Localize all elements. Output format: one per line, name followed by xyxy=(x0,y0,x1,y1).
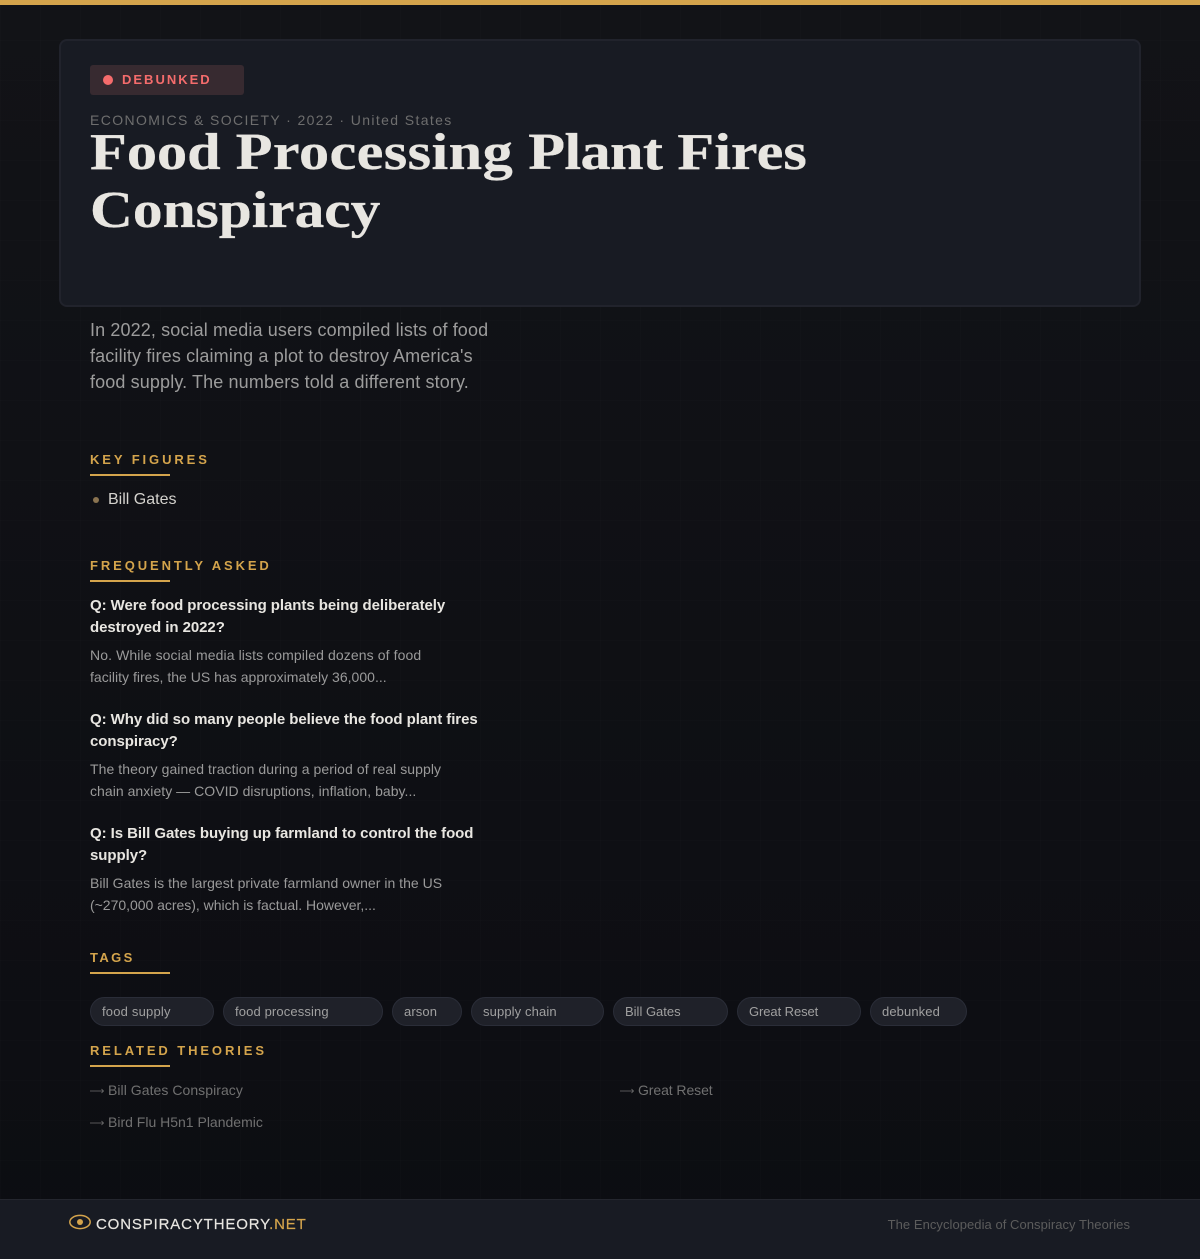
faq 2 question: conspiracy? xyxy=(90,733,178,750)
related link xyxy=(90,1082,243,1098)
summary text xyxy=(90,320,488,392)
category meta line: ECONOMICS & SOCIETY · 2022 · United States xyxy=(90,112,453,128)
faq 3 question: Q: Is Bill Gates buying up farmland to control the food xyxy=(90,825,473,842)
faq 3 answer xyxy=(90,875,442,913)
summary text: food supply. The numbers told a different story. xyxy=(90,372,469,392)
tag list xyxy=(90,997,967,1026)
tag: food processing xyxy=(235,1004,329,1019)
icon: arrow xyxy=(90,1088,104,1094)
faq 1 answer: facility fires, the US has approximately 36,000... xyxy=(90,669,387,685)
tag xyxy=(223,997,383,1026)
heading: frequently asked: FREQUENTLY ASKED xyxy=(90,558,272,573)
faq 2 answer: The theory gained traction during a period of real supply xyxy=(90,761,441,777)
tag xyxy=(90,997,214,1026)
figure name: Bill Gates xyxy=(108,491,176,508)
faq 1 question xyxy=(90,597,446,636)
tag: debunked xyxy=(882,1004,940,1019)
faq 1 answer xyxy=(90,647,421,685)
icon: status dot xyxy=(103,75,113,85)
badge: debunked xyxy=(90,65,244,95)
faq 3 answer: (~270,000 acres), which is factual. However,... xyxy=(90,897,376,913)
faq 2 question xyxy=(90,711,478,750)
related link xyxy=(620,1082,713,1098)
tag: arson xyxy=(404,1004,437,1019)
tag: Great Reset xyxy=(749,1004,818,1019)
faq 3 question: supply? xyxy=(90,847,147,864)
footer xyxy=(0,1199,1200,1259)
faq 2 question: Q: Why did so many people believe the food plant fires xyxy=(90,711,478,728)
key figure item xyxy=(93,491,176,508)
tag: supply chain xyxy=(483,1004,557,1019)
summary text: In 2022, social media users compiled lists of food xyxy=(90,320,488,340)
title: Food Processing Plant Fires xyxy=(90,124,807,181)
icon: arrow xyxy=(90,1120,104,1126)
tag xyxy=(870,997,967,1026)
tag: food supply xyxy=(102,1004,171,1019)
heading: key figures: KEY FIGURES xyxy=(90,452,210,467)
faq 3 answer: Bill Gates is the largest private farmland owner in the US xyxy=(90,875,442,891)
tag xyxy=(737,997,861,1026)
icon: arrow xyxy=(620,1088,634,1094)
link text: Great Reset xyxy=(638,1082,713,1098)
faq 3 question xyxy=(90,825,473,864)
icon: eye logo xyxy=(69,1214,91,1230)
tag xyxy=(471,997,604,1026)
tag xyxy=(613,997,728,1026)
heading: related theories: RELATED THEORIES xyxy=(90,1043,267,1058)
faq 1 question: Q: Were food processing plants being deliberately xyxy=(90,597,445,614)
badge label: DEBUNKED xyxy=(122,72,212,87)
title: Conspiracy xyxy=(90,182,380,239)
tagline: The Encyclopedia of Conspiracy Theories xyxy=(888,1217,1130,1232)
faq 2 answer: chain anxiety — COVID disruptions, inflation, baby... xyxy=(90,783,416,799)
faq 1 question: destroyed in 2022? xyxy=(90,619,225,636)
title xyxy=(90,124,807,239)
panel: hero header xyxy=(59,39,1141,307)
summary text: facility fires claiming a plot to destroy America's xyxy=(90,346,473,366)
related link xyxy=(90,1114,263,1130)
link text: Bill Gates Conspiracy xyxy=(108,1082,243,1098)
faq 2 answer xyxy=(90,761,441,799)
logo text: CONSPIRACYTHEORY.NET xyxy=(96,1216,307,1233)
faq 1 answer: No. While social media lists compiled dozens of food xyxy=(90,647,421,663)
top accent bar xyxy=(0,0,1200,5)
tag xyxy=(392,997,462,1026)
link text: Bird Flu H5n1 Plandemic xyxy=(108,1114,263,1130)
heading: tags: TAGS xyxy=(90,950,135,965)
tag: Bill Gates xyxy=(625,1004,681,1019)
icon: bullet xyxy=(93,497,99,503)
